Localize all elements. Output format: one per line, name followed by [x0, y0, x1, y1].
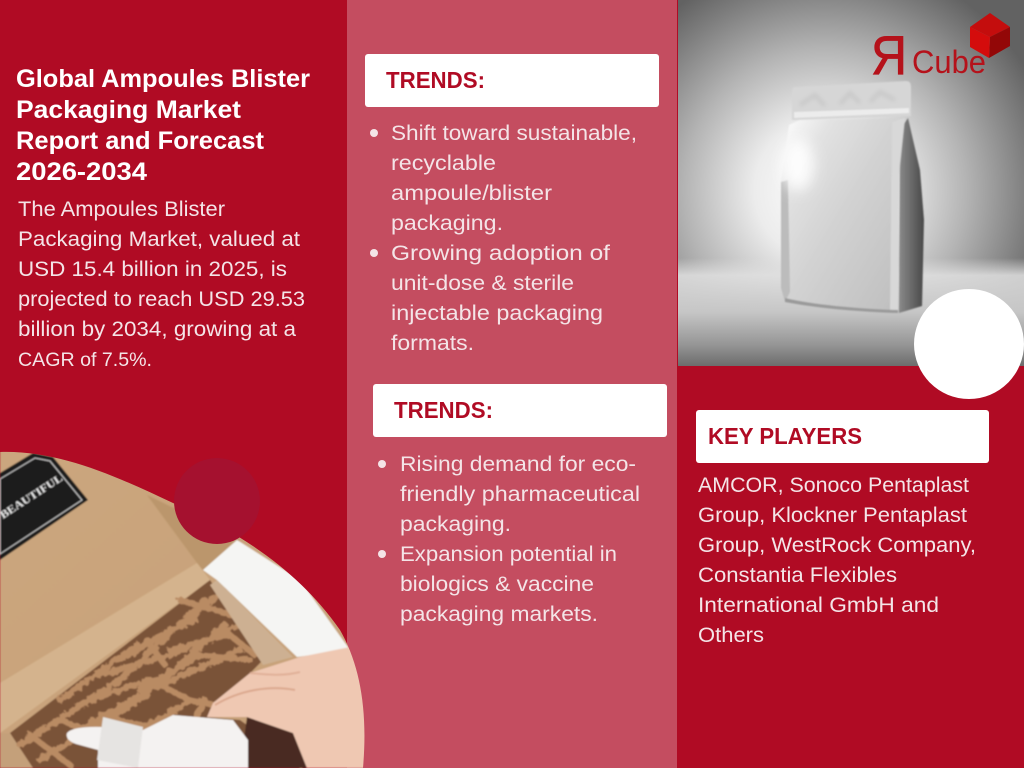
trends list two: Rising demand for eco-: [400, 453, 636, 476]
market summary text: CAGR of 7.5%.: [18, 349, 152, 371]
panel: market overview: [0, 0, 347, 768]
panel: trends: [347, 0, 677, 768]
trends heading one: [365, 54, 659, 107]
key players list: AMCOR, Sonoco Pentaplast: [698, 474, 969, 497]
key players list: Others: [698, 624, 764, 647]
panel: key players: [677, 366, 1024, 768]
market summary text: projected to reach USD 29.53: [18, 288, 305, 311]
trends heading one: TRENDS:: [386, 67, 485, 93]
trends list one: packaging.: [391, 212, 503, 235]
logo: RCube: [871, 13, 1010, 86]
title: 2026-2034: [16, 158, 147, 186]
trends list one: recyclable: [391, 152, 496, 175]
photo: silver pouch on grey backdrop: [678, 0, 1024, 366]
trends list one: formats.: [391, 332, 474, 355]
market summary text: USD 15.4 billion in 2025, is: [18, 258, 287, 281]
trends list one: injectable packaging: [391, 302, 603, 325]
logo: RCube: Я: [871, 24, 907, 86]
trends heading two: [373, 384, 667, 437]
decorative white circle: [914, 289, 1024, 399]
trends list one: ampoule/blister: [391, 182, 552, 205]
key players list: Group, WestRock Company,: [698, 534, 976, 557]
trends list one: Growing adoption of: [391, 242, 610, 265]
key players list: International GmbH and: [698, 594, 939, 617]
market summary text: The Ampoules Blister: [18, 198, 225, 221]
market summary text: [18, 198, 305, 371]
key players list: Group, Klockner Pentaplast: [698, 504, 967, 527]
trends list two: packaging.: [400, 513, 511, 536]
trends list two: friendly pharmaceutical: [400, 483, 640, 506]
logo: RCube: Cube: [912, 44, 986, 80]
trends list one: unit-dose & sterile: [391, 272, 574, 295]
market summary text: Packaging Market, valued at: [18, 228, 300, 251]
trends list two: biologics & vaccine: [400, 573, 594, 596]
key players list: [698, 474, 976, 647]
title: Report and Forecast: [16, 127, 265, 155]
key players list: Constantia Flexibles: [698, 564, 897, 587]
trends heading two: TRENDS:: [394, 397, 493, 423]
trends list two: Expansion potential in: [400, 543, 617, 566]
decorative dark red circle: [174, 458, 260, 544]
title: Packaging Market: [16, 96, 242, 124]
key players heading: KEY PLAYERS: [708, 423, 862, 449]
photo: open cardboard box with bottle and hand: [0, 440, 370, 768]
title: Global Ampoules Blister: [16, 65, 310, 93]
title: [16, 65, 310, 186]
trends list two: packaging markets.: [400, 603, 598, 626]
key players heading: [696, 410, 989, 463]
trends list one: Shift toward sustainable,: [391, 122, 637, 145]
trends list one: [370, 122, 637, 355]
market summary text: billion by 2034, growing at a: [18, 318, 296, 341]
trends list two: [378, 453, 640, 626]
logo cube: [970, 13, 1010, 58]
